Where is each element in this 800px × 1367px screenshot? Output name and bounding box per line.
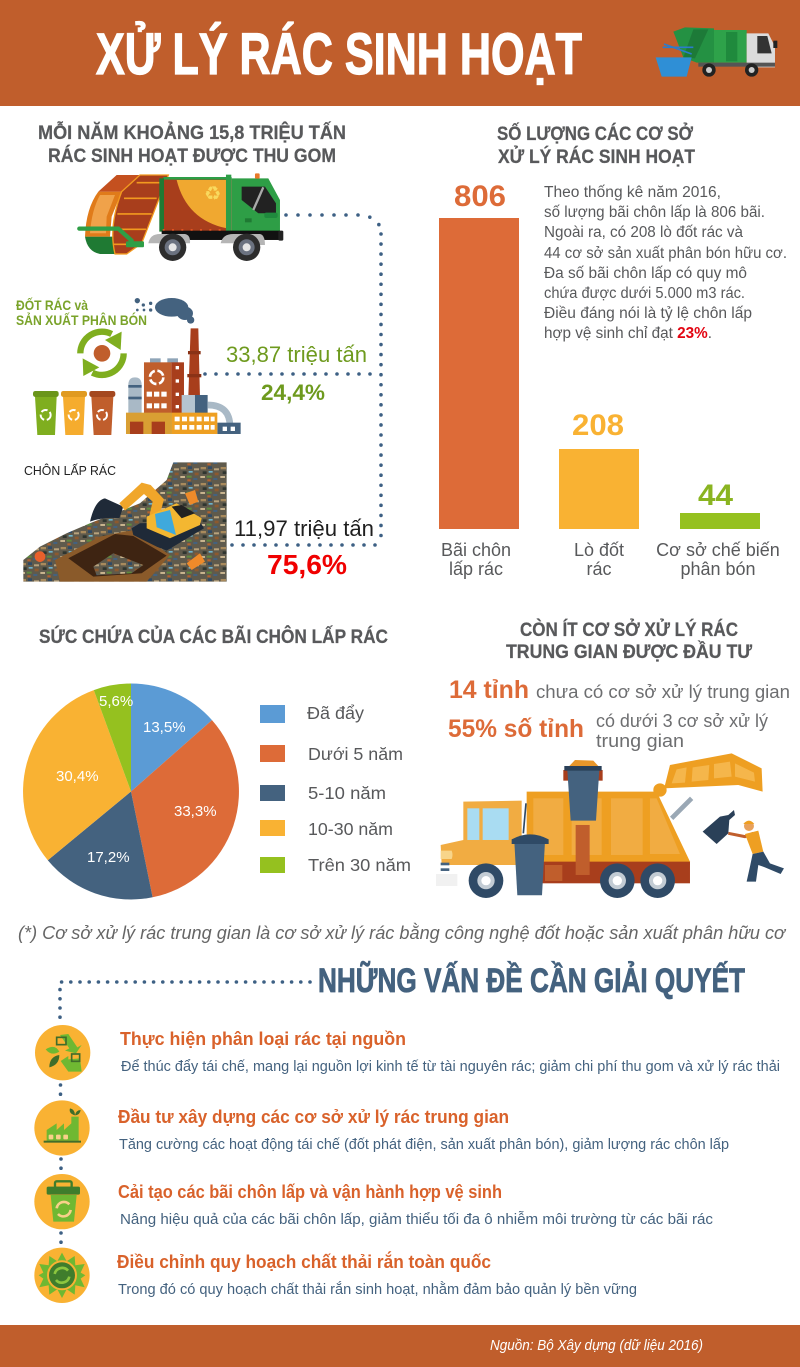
- text block: statistics paragraph: số lượng bãi chôn lấp là 806 bãi.: [544, 204, 765, 221]
- stat: provinces without facilities: chưa có cơ sở xử lý trung gian: [536, 682, 790, 702]
- issue 2: [118, 1107, 729, 1153]
- issue 2: Tăng cường các hoạt động tái chế (đốt phát điện, sản xuất phân bón), giảm lượng rác chôn lấp: [119, 1137, 729, 1153]
- stat: incineration tonnage: [226, 342, 367, 405]
- heading: yearly collected waste: RÁC SINH HOẠT ĐƯỢC THU GOM: [48, 145, 336, 167]
- stat: provinces with few facilities: 55% số tỉnh: [448, 715, 584, 743]
- source note: Nguồn: Bộ Xây dựng (dữ liệu 2016): [490, 1338, 703, 1354]
- text block: statistics paragraph: Ngoài ra, có 208 lò đốt rác và: [544, 224, 743, 241]
- icon: green garbage truck: ♻: [204, 184, 221, 205]
- footer band: [0, 1325, 800, 1367]
- heading: number of facilities: XỬ LÝ RÁC SINH HOẠT: [498, 146, 695, 168]
- issue 4: Trong đó có quy hoạch chất thải rắn sinh hoạt, nhằm đảm bảo quản lý bền vững: [118, 1281, 637, 1298]
- bar: incinerators: rác: [586, 559, 612, 579]
- title: XỬ LÝ RÁC SINH HOẠT: [96, 22, 582, 87]
- footnote: (*) Cơ sở xử lý rác trung gian là cơ sở xử lý rác bằng công nghệ đốt hoặc sản xuất phân hữu cơ: [18, 923, 787, 943]
- pie chart: landfill remaining capacity: [23, 684, 239, 899]
- issue 2: Đầu tư xây dựng các cơ sở xử lý rác trung gian: [118, 1107, 509, 1127]
- icon: landfill with excavator: [23, 462, 227, 582]
- text block: statistics paragraph: Đa số bãi chôn lấp có quy mô: [544, 265, 747, 282]
- stat: landfill share: 75,6%: [267, 549, 347, 580]
- text block: statistics paragraph: chứa được dưới 5.000 m3 rác.: [544, 285, 745, 302]
- text block: statistics paragraph: hợp vệ sinh chỉ đạt 23%.: [544, 325, 712, 342]
- bar: compost plants: [656, 479, 780, 579]
- stat: landfill tonnage: 11,97 triệu tấn: [234, 516, 374, 541]
- bar: incinerators: 208: [572, 409, 624, 442]
- dotted connector: incineration branch: [205, 372, 381, 376]
- legend: capacity categories: 5-10 năm: [308, 783, 386, 803]
- stat: provinces with few facilities: trung gian: [596, 731, 684, 751]
- dotted connector: vertical trunk: [379, 234, 383, 545]
- header band: [0, 0, 800, 106]
- heading: few intermediate facilities: CÒN ÍT CƠ SỞ XỬ LÝ RÁC: [520, 619, 738, 641]
- legend: capacity categories: [260, 703, 411, 875]
- label: incineration and fertilizer: ĐỐT RÁC và: [16, 296, 88, 313]
- label: landfill: CHÔN LẤP RÁC: [24, 463, 116, 478]
- issue 3: [118, 1182, 713, 1228]
- heading: landfill capacity: SỨC CHỨA CỦA CÁC BÃI CHÔN LẤP RÁC: [39, 626, 388, 648]
- text block: statistics paragraph: Điều đáng nói là tỷ lệ chôn lấp: [544, 305, 752, 322]
- text block: statistics paragraph: [544, 184, 787, 342]
- heading: few intermediate facilities: TRUNG GIAN ĐƯỢC ĐẦU TƯ: [506, 641, 752, 663]
- bar: compost plants: 44: [698, 479, 733, 512]
- stat: provinces without facilities: [449, 676, 790, 704]
- bar: compost plants: Cơ sở chế biến: [656, 540, 780, 560]
- legend: capacity categories: Trên 30 năm: [308, 855, 411, 875]
- pie chart: landfill remaining capacity: 13,5%: [143, 719, 186, 736]
- heading: few intermediate facilities: [506, 619, 752, 663]
- legend: capacity categories: 10-30 năm: [308, 819, 393, 839]
- pie chart: landfill remaining capacity: 33,3%: [174, 803, 217, 820]
- bar: compost plants: phân bón: [680, 559, 756, 579]
- stat: landfill tonnage: [234, 516, 374, 580]
- icon: green factory: [34, 1100, 90, 1156]
- icon: header garbage truck: [656, 27, 777, 77]
- issue 1: Thực hiện phân loại rác tại nguồn: [120, 1029, 406, 1049]
- issue 1: [120, 1029, 780, 1075]
- heading: yearly collected waste: [38, 122, 346, 167]
- bar: incinerators: Lò đốt: [574, 540, 624, 560]
- legend: capacity categories: Đã đẩy: [307, 703, 364, 723]
- heading: number of facilities: [497, 123, 695, 168]
- pie chart: landfill remaining capacity: 30,4%: [56, 768, 99, 785]
- stat: incineration share: 24,4%: [261, 380, 325, 405]
- text block: statistics paragraph: 44 cơ sở sản xuất phân bón hữu cơ.: [544, 245, 787, 262]
- icon: green recycling bin: [34, 1174, 90, 1229]
- bar: landfill sites: [439, 180, 519, 579]
- pie chart: landfill remaining capacity: 5,6%: [99, 693, 133, 710]
- text block: statistics paragraph: Theo thống kê năm 2016,: [544, 184, 721, 201]
- issue 4: [117, 1251, 637, 1298]
- dotted connector: issues timeline: [60, 982, 310, 1245]
- heading: number of facilities: SỐ LƯỢNG CÁC CƠ SỞ: [497, 123, 694, 145]
- bar chart: facilities: [439, 180, 780, 579]
- label: incineration and fertilizer: [16, 296, 147, 328]
- stat: provinces with few facilities: [448, 711, 768, 751]
- issue 3: Nâng hiệu quả của các bãi chôn lấp, giảm thiểu tối đa ô nhiễm môi trường từ các bãi rác: [120, 1211, 713, 1228]
- stat: provinces with few facilities: có dưới 3 cơ sở xử lý: [596, 711, 768, 731]
- dotted connector: truck to treatment routes: [286, 215, 381, 234]
- icon: recycling arrows and leaf: [35, 1025, 90, 1080]
- bar: landfill sites: lấp rác: [449, 559, 503, 579]
- bar: landfill sites: Bãi chôn: [441, 540, 511, 560]
- issue 4: Điều chỉnh quy hoạch chất thải rắn toàn quốc: [117, 1251, 491, 1272]
- bar: incinerators: [559, 409, 639, 579]
- issue 1: Để thúc đẩy tái chế, mang lại nguồn lợi kinh tế từ tài nguyên rác; giảm chi phí thu gom và xử lý rác thải: [121, 1059, 780, 1075]
- issue 3: Cải tạo các bãi chôn lấp và vận hành hợp vệ sinh: [118, 1182, 502, 1202]
- dotted connector: landfill branch: [232, 543, 381, 547]
- pie chart: landfill remaining capacity: 17,2%: [87, 849, 130, 866]
- icon: green sun with recycling: [34, 1248, 90, 1303]
- bar: landfill sites: 806: [454, 180, 506, 213]
- stat: provinces without facilities: 14 tỉnh: [449, 676, 529, 704]
- icon: factory with recycling bins: [33, 298, 241, 435]
- icon: orange truck and worker: [436, 753, 784, 898]
- icon: green garbage truck: [79, 173, 283, 261]
- label: incineration and fertilizer: SẢN XUẤT PHÂN BÓN: [16, 311, 147, 328]
- heading: yearly collected waste: MỖI NĂM KHOẢNG 15,8 TRIỆU TẤN: [38, 122, 346, 144]
- stat: incineration tonnage: 33,87 triệu tấn: [226, 342, 367, 367]
- legend: capacity categories: Dưới 5 năm: [308, 744, 403, 764]
